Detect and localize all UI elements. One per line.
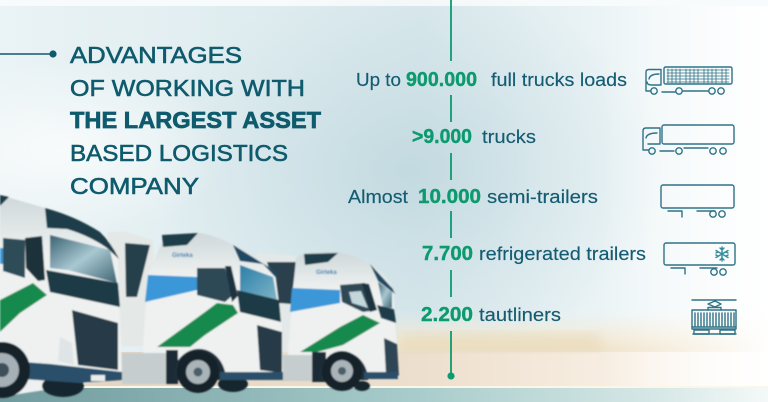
heading connector line with dot [0, 50, 57, 58]
stat: trucks: >9.000 [412, 126, 472, 148]
icon: semi-trailer [661, 185, 734, 217]
icon: truck with loaded trailer [646, 67, 732, 94]
stat: trucks [412, 126, 536, 148]
title [70, 42, 322, 199]
stat: full truck loads: 900.000 [406, 69, 477, 91]
photo: three white logistics trucks [0, 195, 399, 398]
title: COMPANY [70, 173, 199, 199]
title: ADVANTAGES [70, 42, 242, 68]
stat: semi-trailers [348, 186, 598, 208]
stat: full truck loads: Up to [356, 69, 401, 90]
stat: semi-trailers: semi-trailers [487, 186, 598, 207]
title: BASED LOGISTICS [70, 140, 288, 166]
stat: semi-trailers: Almost [348, 186, 408, 207]
stat: semi-trailers: 10.000 [418, 186, 481, 208]
logo: Girteka on truck 3: Girteka [316, 270, 337, 276]
stat: trucks: trucks [482, 126, 536, 147]
stat: tautliners [421, 304, 561, 326]
icon: tautliner railcar [692, 300, 736, 334]
stat: tautliners: 2.200 [421, 304, 473, 326]
stat: tautliners: tautliners [479, 304, 561, 325]
stat: full truck loads [356, 69, 627, 91]
title: OF WORKING WITH [70, 75, 305, 101]
stat: full truck loads: full trucks loads [491, 69, 627, 90]
title: THE LARGEST ASSET [70, 107, 322, 133]
stat: refrigerated trailers: 7.700 [422, 243, 473, 265]
icon: truck with box trailer [643, 125, 734, 154]
truck 1 (front) [0, 195, 122, 398]
stat: refrigerated trailers: refrigerated trailers [479, 243, 646, 264]
truck 2 (middle) [107, 232, 283, 393]
logo: Girteka on truck 2: Girteka [172, 253, 193, 259]
truck 3 (rear) [257, 252, 399, 391]
vertical timeline [447, 0, 455, 380]
icon: refrigerated trailer with snowflake [664, 243, 735, 275]
stat: refrigerated trailers [422, 243, 646, 265]
